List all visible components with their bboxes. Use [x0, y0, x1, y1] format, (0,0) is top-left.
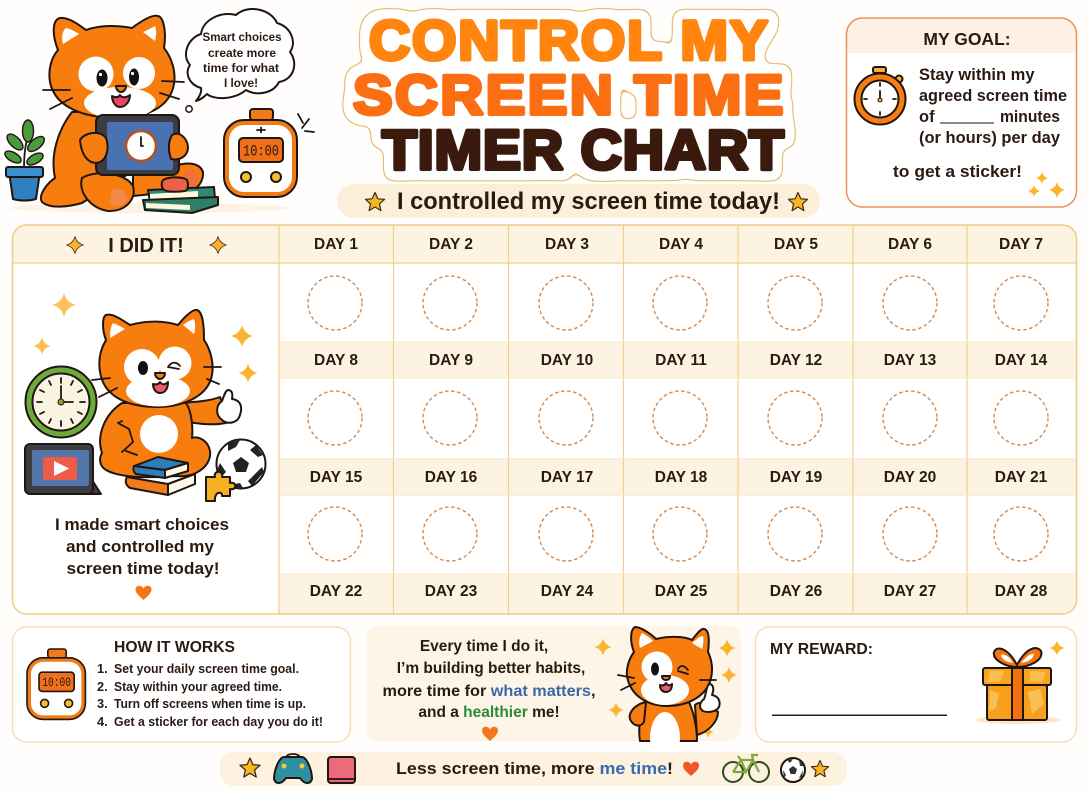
icon: heart [482, 727, 498, 741]
day labels row 4: DAY 27 [884, 583, 936, 600]
day labels row 2: DAY 14 [995, 352, 1048, 369]
encouragement text: and controlled my [66, 537, 215, 556]
day labels row 2: DAY 13 [884, 352, 937, 369]
day labels row 2 [314, 352, 1048, 369]
panel: my goal [846, 18, 1076, 207]
cat arm [180, 397, 230, 424]
cat body [100, 403, 210, 477]
steps list: Turn off screens when time is up. [114, 696, 306, 711]
steps list: Set your daily screen time goal. [114, 661, 299, 676]
day labels row 3 [310, 469, 1048, 486]
icon: digital timer small [27, 649, 85, 719]
day labels row 4: DAY 23 [425, 583, 478, 600]
day labels row 1: DAY 5 [774, 236, 818, 253]
speech cloud: create more [208, 46, 276, 60]
day labels row 2: DAY 8 [314, 352, 358, 369]
steps list: Get a sticker for each day you do it! [114, 714, 323, 729]
sparkles [594, 638, 737, 738]
goal text: (or hours) per day [919, 129, 1061, 147]
message text [382, 638, 596, 721]
icon: tablet with clock [96, 115, 179, 175]
icon: books and eraser [143, 177, 218, 213]
speech cloud: I love! [224, 76, 258, 90]
icon: star [240, 758, 260, 777]
goal text: agreed screen time [919, 87, 1067, 105]
write-in line [772, 714, 947, 716]
icon: bicycle [723, 755, 769, 782]
cat head [92, 310, 221, 407]
day labels row 1 [314, 236, 1043, 253]
day labels row 1: DAY 4 [659, 236, 703, 253]
message text: more time for what matters , [382, 683, 596, 700]
day labels row 1: DAY 6 [888, 236, 932, 253]
day labels row 2: DAY 12 [770, 352, 822, 369]
heading: how it works: HOW IT WORKS [114, 639, 235, 656]
heading: my reward: MY REWARD: [770, 641, 873, 658]
sparkles [34, 293, 258, 382]
icon: soccer ball [216, 440, 266, 489]
steps list: 1. [97, 661, 108, 676]
day labels row 3: DAY 17 [541, 469, 593, 486]
panel: how it works [12, 627, 350, 742]
day labels row 1: DAY 2 [429, 236, 473, 253]
panel: tracking grid [12, 225, 1078, 615]
steps list: 4. [97, 714, 108, 729]
icon: heart [683, 762, 699, 776]
illustration: winking cat with clock, tablet, books and ball [25, 293, 266, 600]
icon: game controller [274, 754, 312, 783]
icon: digital timer [224, 109, 314, 197]
icon: heart [136, 586, 152, 600]
speech cloud: Smart choices [202, 30, 282, 44]
heading: i did it: I DID IT! [108, 235, 184, 257]
icon: book [328, 757, 355, 783]
day labels row 3: DAY 20 [884, 469, 936, 486]
bottom banner [220, 752, 847, 786]
cat thumb [217, 390, 241, 423]
title line: control my: CONTROL MY [369, 9, 768, 71]
subtitle banner [337, 184, 820, 218]
day labels row 4 [310, 583, 1048, 600]
day labels row 1: DAY 7 [999, 236, 1043, 253]
icon: books [126, 457, 195, 495]
illustration: thumbs-up cat [618, 627, 720, 764]
icon: soccer ball [781, 758, 805, 782]
day labels row 4: DAY 25 [655, 583, 708, 600]
heading: my goal: MY GOAL: [923, 29, 1011, 49]
steps list [97, 661, 323, 729]
sticker circles row 1 [308, 276, 1048, 330]
message text: Every time I do it, [420, 638, 548, 655]
goal text: of [919, 108, 935, 126]
icon: star [811, 760, 829, 777]
steps list: 2. [97, 679, 108, 694]
goal text [893, 66, 1067, 181]
day labels row 4: DAY 24 [541, 583, 594, 600]
day labels row 1: DAY 1 [314, 236, 358, 253]
cat body [41, 112, 203, 211]
day labels row 4: DAY 22 [310, 583, 362, 600]
illustration: cat with tablet [3, 16, 290, 213]
speech cloud: time for what [203, 61, 279, 75]
steps list: 3. [97, 696, 108, 711]
panel: habits message [366, 626, 741, 764]
goal text: to get a sticker! [893, 163, 1022, 181]
day labels row 3: DAY 16 [425, 469, 478, 486]
title [353, 9, 784, 181]
message text: and a healthier me! [418, 704, 560, 721]
cat head [43, 16, 184, 119]
panel: my reward [756, 627, 1076, 742]
goal text: minutes [1000, 108, 1060, 126]
day labels row 3: DAY 21 [995, 469, 1048, 486]
encouragement text: I made smart choices [55, 515, 229, 534]
day labels row 3: DAY 18 [655, 469, 708, 486]
icon: digital timer small: 10:00 [42, 675, 71, 690]
icon: gift box [974, 640, 1064, 724]
steps list: Stay within your agreed time. [114, 679, 282, 694]
day labels row 2: DAY 9 [429, 352, 473, 369]
day labels row 1: DAY 3 [545, 236, 589, 253]
slogan: Less screen time, more me time! [396, 759, 673, 778]
belly [140, 415, 178, 453]
icon: digital timer: 10:00 [243, 142, 279, 160]
speech cloud [186, 9, 294, 112]
encouragement text: screen time today! [66, 559, 220, 578]
subtitle banner: I controlled my screen time today! [397, 188, 780, 215]
sticker circles row 2 [308, 391, 1048, 445]
encouragement text [55, 515, 229, 578]
sticker circles row 3 [308, 507, 1048, 561]
day labels row 2: DAY 10 [541, 352, 593, 369]
message text: I’m building better habits, [397, 660, 585, 677]
cat paws [80, 133, 188, 163]
day labels row 2: DAY 11 [655, 352, 707, 369]
day labels row 3: DAY 19 [770, 469, 823, 486]
icon: potted plant [3, 120, 47, 200]
icon: sparkles [1028, 172, 1065, 198]
title line: screen time: SCREEN TIME [353, 65, 783, 127]
day labels row 4: DAY 28 [995, 583, 1048, 600]
icon: puzzle piece [206, 472, 235, 501]
icon: wall clock [26, 366, 96, 438]
goal text: Stay within my [919, 66, 1035, 84]
icon: tablet with play button [25, 444, 101, 494]
heading: i did it [66, 235, 226, 257]
title line: timer chart: TIMER CHART [382, 119, 784, 181]
icon: stopwatch [854, 67, 906, 124]
day labels row 3: DAY 15 [310, 469, 363, 486]
day labels row 4: DAY 26 [770, 583, 823, 600]
